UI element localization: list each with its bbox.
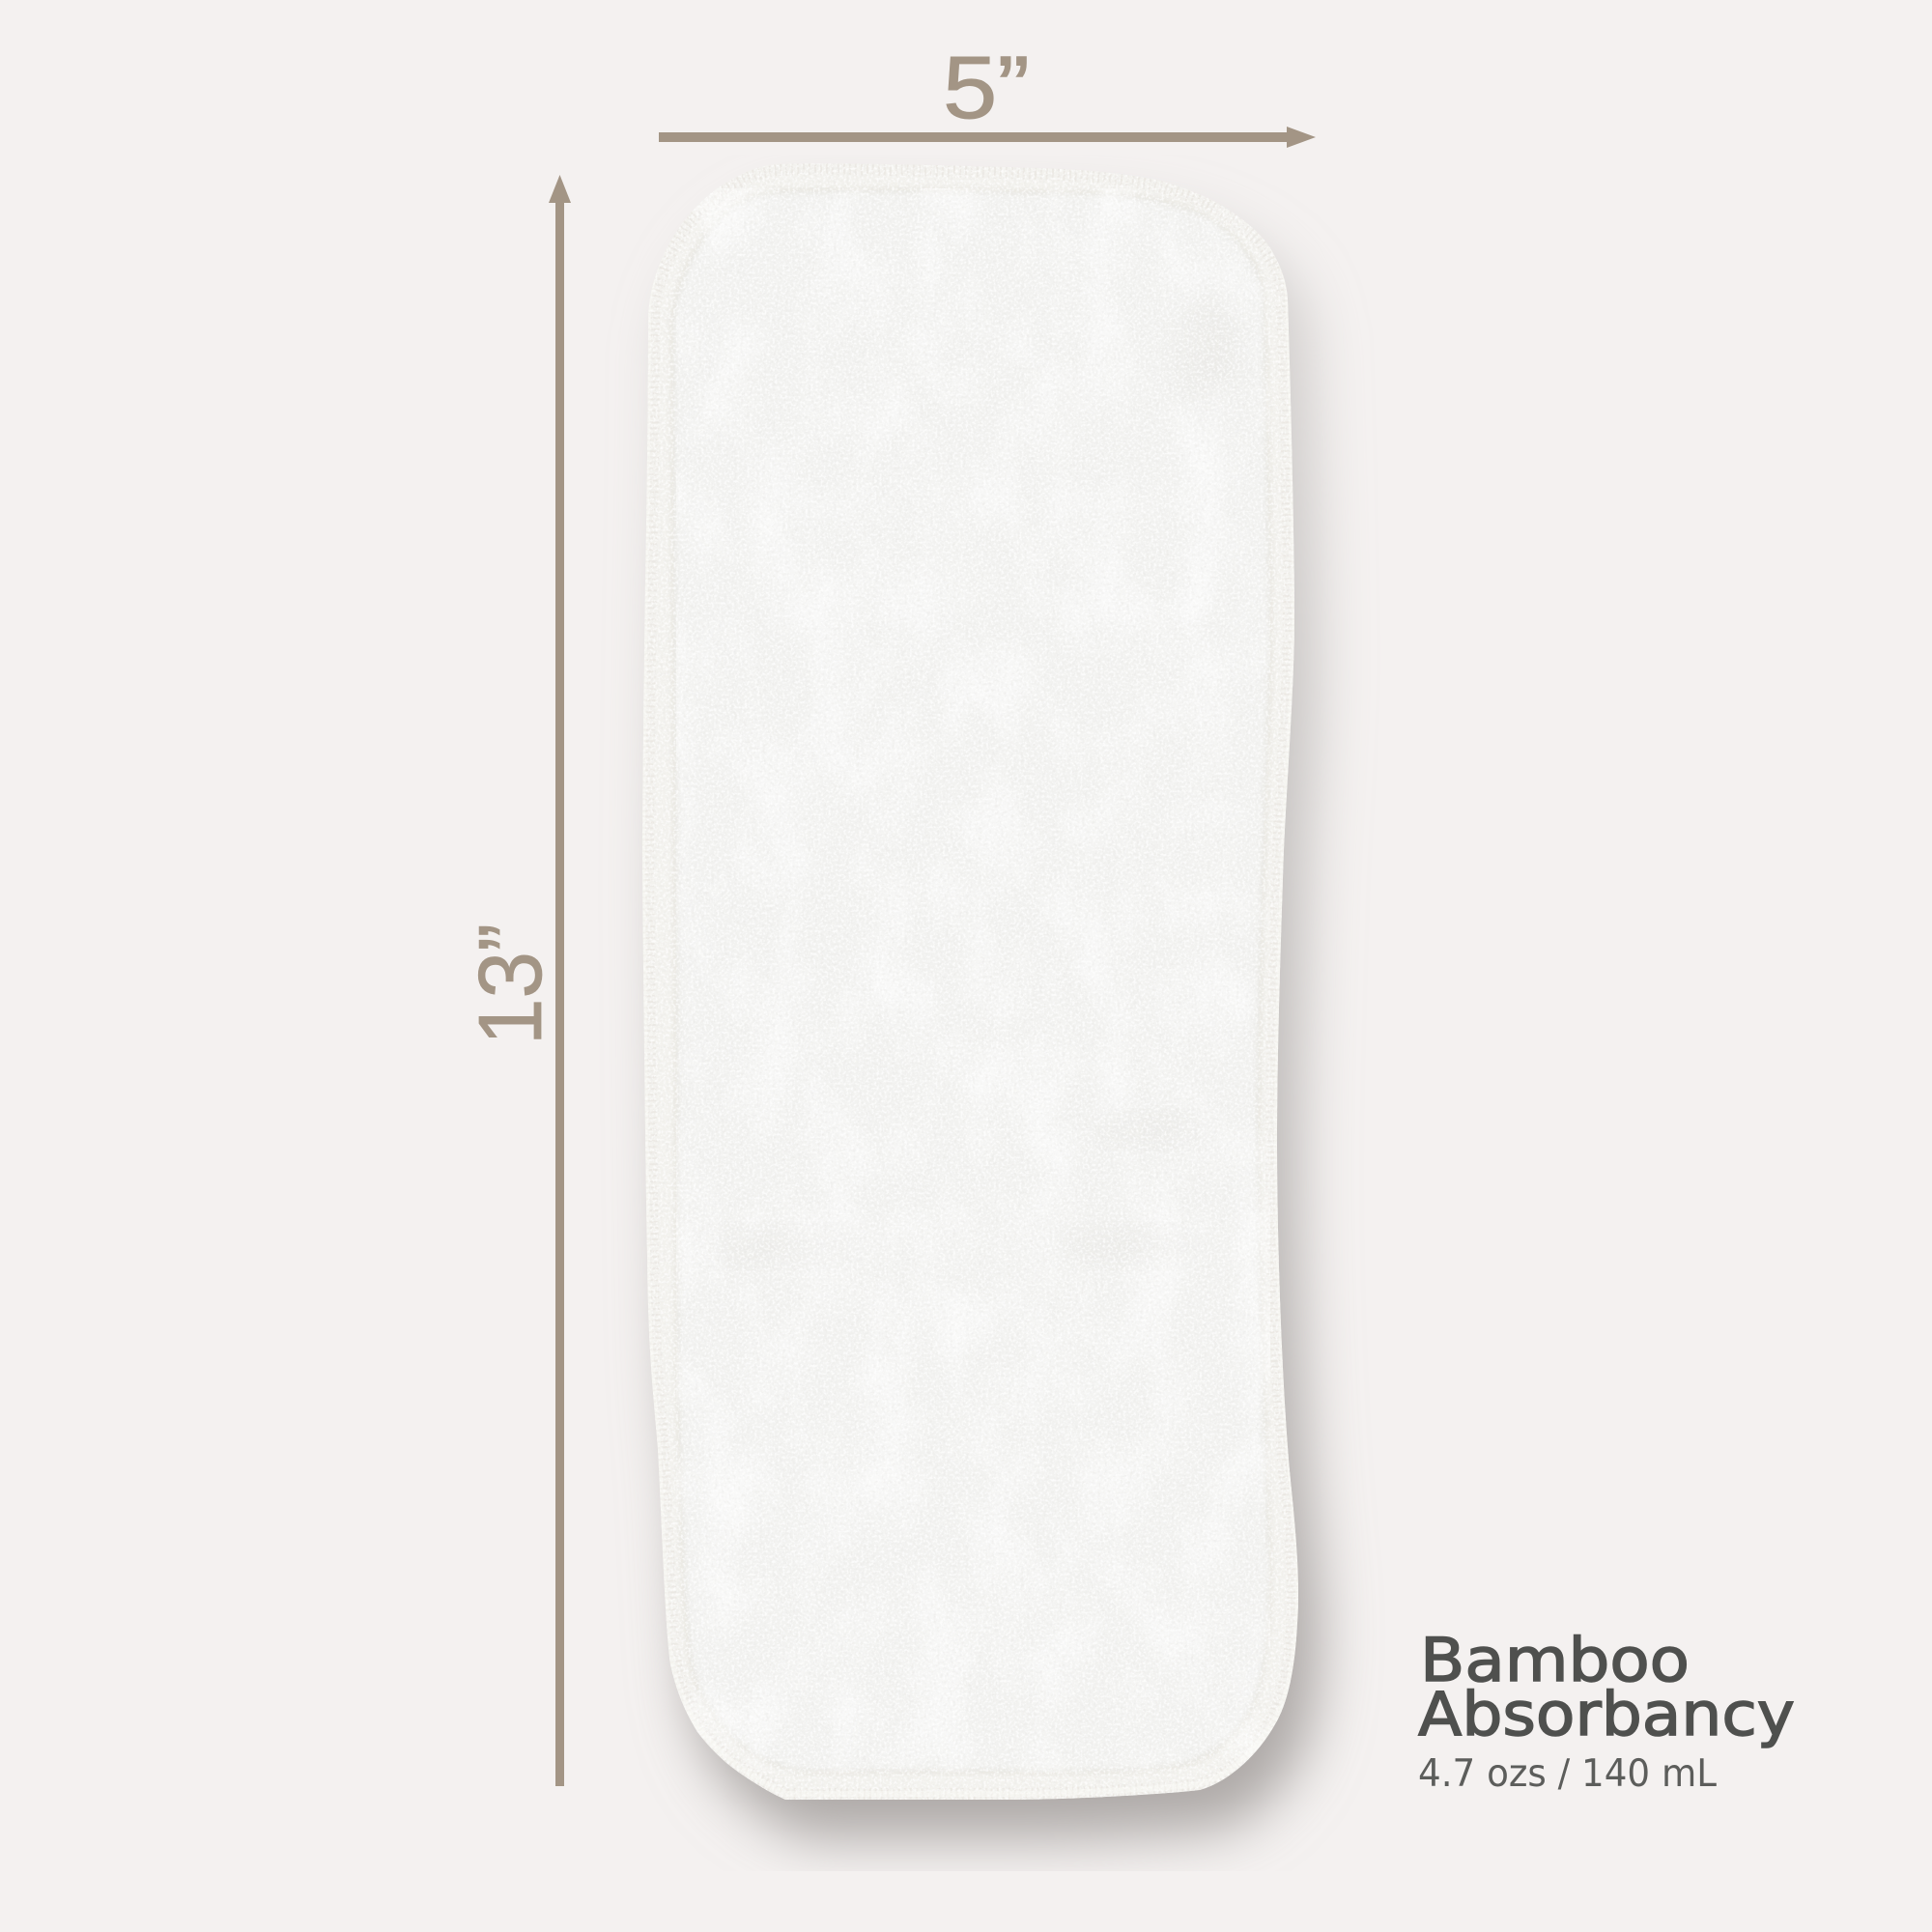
- terry texture shadows: [638, 159, 1314, 1806]
- callout measurement: 4.7 ozs / 140 mL: [1418, 1752, 1717, 1796]
- horizontal width arrow: [659, 127, 1316, 148]
- terry texture highlights: [638, 159, 1314, 1806]
- terry centre: [672, 190, 1270, 1772]
- height label: 13”: [460, 923, 560, 1045]
- pad rim: [642, 163, 1298, 1800]
- soft shaded folds: [1200, 332, 1204, 348]
- mottled highlights: [676, 188, 1270, 1773]
- absorbancy callout: [1418, 1625, 1795, 1796]
- stitched rim ribbing: [642, 163, 1298, 1800]
- vertical height arrow: [549, 175, 571, 1786]
- callout title: Absorbancy: [1418, 1679, 1795, 1749]
- callout title: Bamboo: [1420, 1625, 1690, 1695]
- inner seam shade: [672, 190, 1270, 1772]
- pad drop shadow: [656, 188, 1320, 1838]
- callout title: [1418, 1625, 1795, 1749]
- bamboo insert pad: [638, 157, 1314, 1806]
- width label: 5”: [943, 39, 1030, 137]
- rim highlight: [642, 157, 1298, 1794]
